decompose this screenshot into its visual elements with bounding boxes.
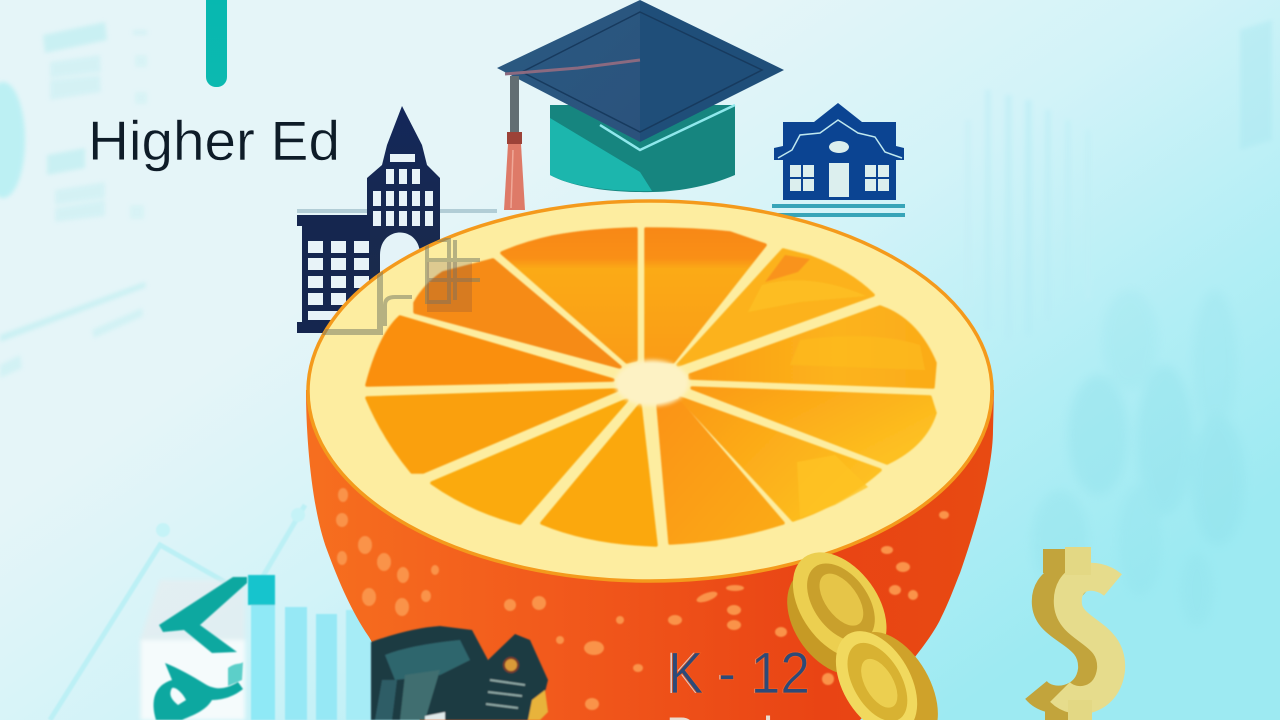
icon: house [772, 103, 905, 217]
rind [308, 201, 992, 581]
icon: graduation cap [497, 0, 784, 210]
white panel [140, 580, 245, 720]
faded dashboard pattern: top left [0, 22, 147, 378]
label: K-12: K - 12 [668, 641, 810, 706]
faded line chart: bottom left [50, 505, 305, 720]
fruit centre [615, 360, 689, 406]
orange skin [306, 390, 994, 720]
cyan bar chart [248, 575, 376, 720]
icon: dark machine [371, 626, 548, 720]
building seen through rind [322, 238, 480, 335]
fruit segments [367, 229, 935, 545]
icon: university building [297, 106, 497, 333]
skin pores [336, 488, 949, 710]
teal bar [206, 0, 227, 87]
faded coin stacks: right [1032, 290, 1245, 626]
teal garbled glyphs [154, 577, 247, 720]
heading: Higher Ed: Higher Ed [88, 109, 340, 172]
faded bar pattern: right [965, 20, 1272, 340]
icon: dollar sign [1036, 547, 1113, 720]
icon: gold coins [762, 535, 956, 720]
orange fruit [300, 201, 994, 720]
label: K-12: K - 12 [666, 641, 810, 706]
